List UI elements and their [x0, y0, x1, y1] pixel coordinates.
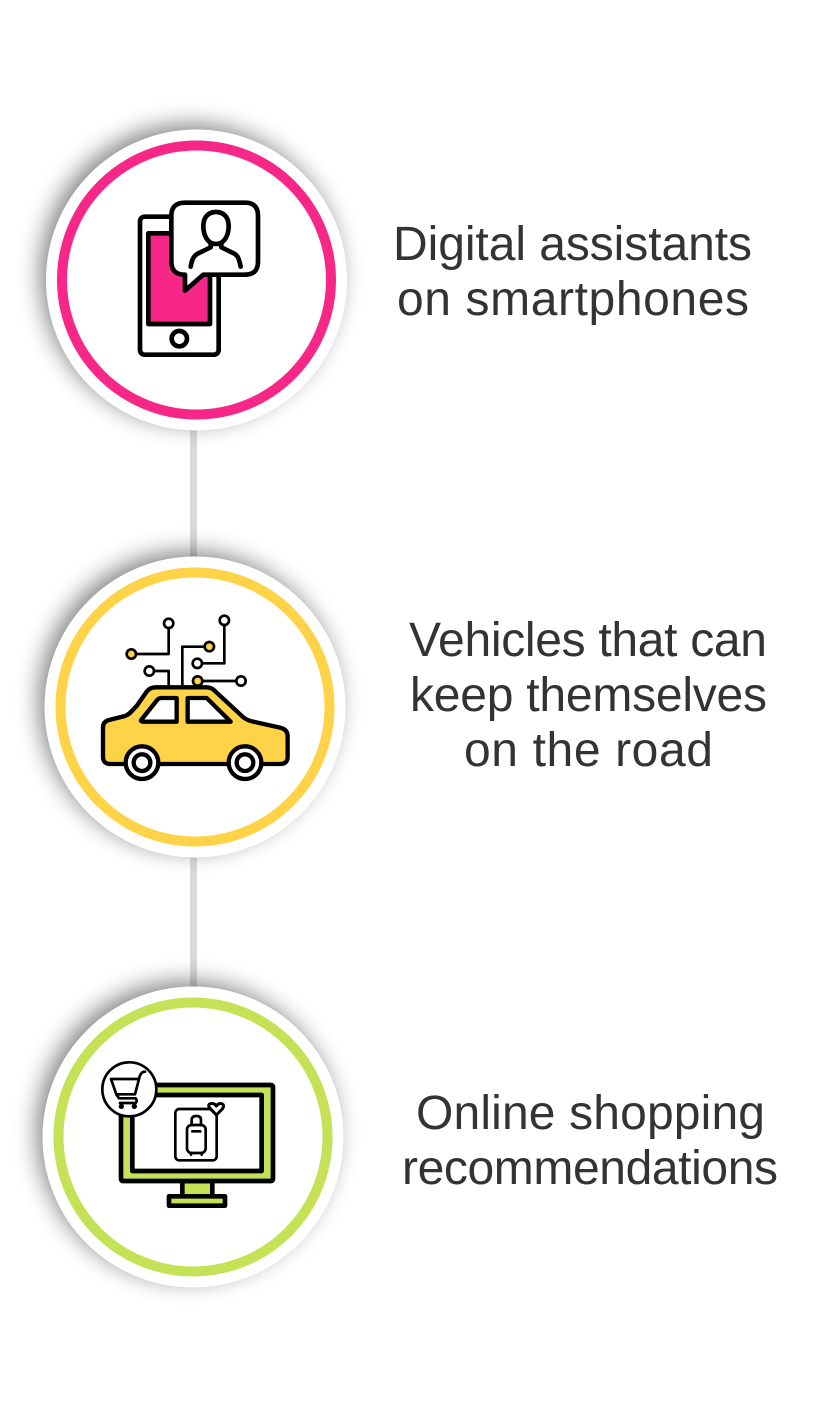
icon: monitor with shopping cart: [102, 1062, 273, 1206]
panel: online shopping circle: [38, 982, 344, 1288]
text: online shopping: [402, 1087, 778, 1195]
text: online shopping: Online shopping: [416, 1087, 765, 1140]
panel: vehicles circle: [40, 552, 346, 858]
text: vehicles: Vehicles that can: [409, 614, 767, 667]
text: vehicles: on the road: [464, 724, 713, 777]
icon: smartphone with chat bubble: [140, 203, 258, 355]
text: vehicles: [409, 614, 767, 777]
text: online shopping: recommendations: [402, 1142, 778, 1195]
text: digital assistants: Digital assistants: [393, 218, 752, 271]
connector: top: [190, 425, 197, 561]
connector: bottom: [190, 852, 197, 990]
text: digital assistants: on smartphones: [397, 273, 749, 326]
text: digital assistants: [393, 218, 752, 326]
icon: connected car: [103, 616, 288, 779]
text: vehicles: keep themselves: [410, 669, 767, 722]
panel: digital assistants circle: [41, 125, 347, 430]
